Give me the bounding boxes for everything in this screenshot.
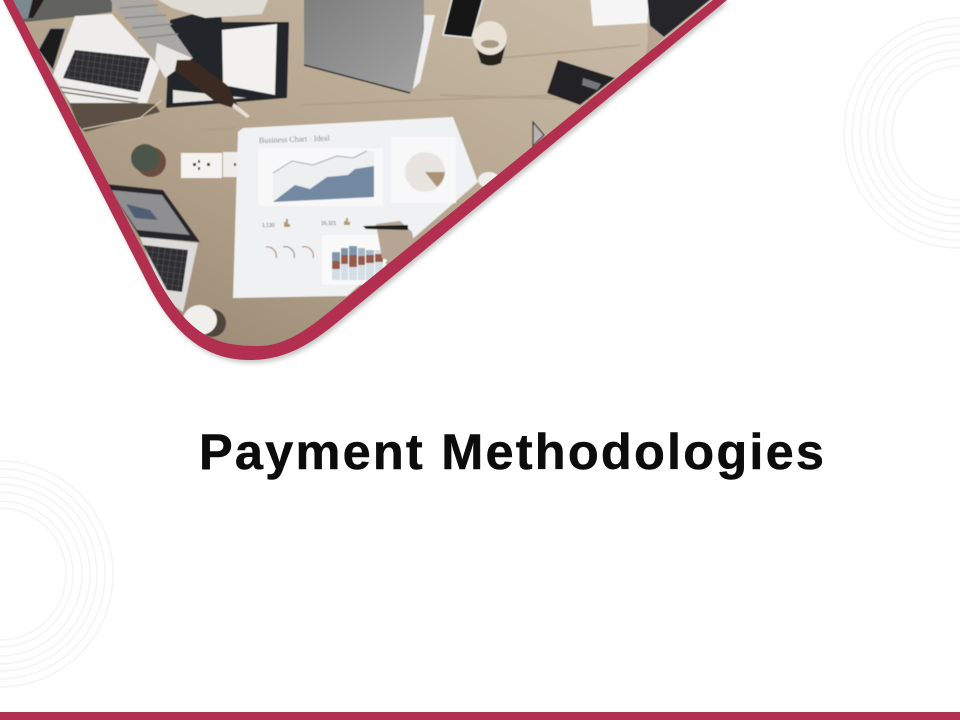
area chart	[273, 151, 374, 202]
power outlet	[181, 152, 239, 178]
top left edge objects	[0, 0, 112, 22]
decorative rings: top right	[844, 18, 960, 248]
coffee cup	[473, 21, 507, 66]
decorative rings: bottom left	[0, 461, 113, 687]
triangle laptop corner	[533, 122, 544, 146]
lower laptop	[106, 184, 200, 312]
small metric labels: 1,130	[262, 223, 275, 229]
arm with striped sleeve	[110, 0, 270, 118]
person head	[647, 0, 716, 37]
title: Payment Methodologies	[199, 423, 824, 480]
hero photo frame with crimson border	[0, 0, 760, 380]
notebook	[166, 7, 289, 108]
stacked bars	[332, 246, 383, 280]
phone left	[38, 28, 66, 71]
top phone	[443, 0, 484, 38]
small metric labels: 16,321	[321, 221, 337, 227]
report sheet	[233, 117, 478, 298]
shadow under laptop	[68, 100, 160, 132]
gauges	[266, 247, 313, 258]
coffee cup with lid	[183, 305, 226, 337]
writing hand with pen	[363, 221, 414, 262]
pie chart panel	[405, 152, 457, 204]
white laptop	[53, 14, 160, 103]
silver laptop	[412, 15, 435, 90]
cactus plant	[131, 144, 166, 177]
small metric labels	[262, 221, 337, 229]
bottom bar	[0, 712, 960, 720]
report sheet: Business Chart · Ideal	[259, 134, 331, 145]
white mug rim	[478, 172, 500, 188]
white phone	[590, 0, 650, 26]
photo: team desk from above	[13, 0, 713, 346]
wallet	[547, 60, 615, 105]
